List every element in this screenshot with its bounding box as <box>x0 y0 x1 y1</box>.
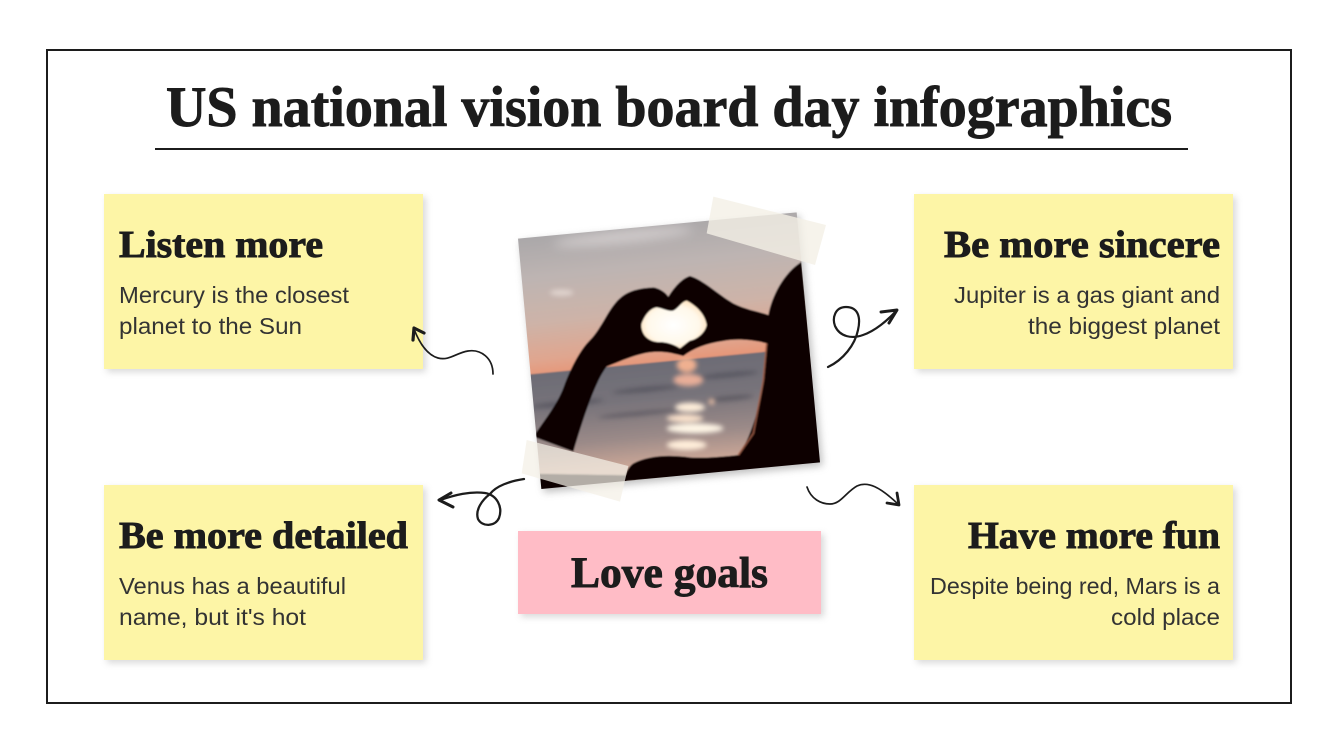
heading: listen more: Listen more <box>119 224 323 266</box>
panel: have more fun <box>914 485 1236 663</box>
text: have more fun <box>930 573 1221 630</box>
text: listen more: planet to the Sun <box>119 313 302 339</box>
tape: top right <box>707 197 826 265</box>
text: be more sincere <box>954 282 1220 339</box>
text: be more detailed: name, but it's hot <box>119 604 306 630</box>
heart opening glow <box>640 299 708 350</box>
heading: be more sincere: Be more sincere <box>944 224 1220 266</box>
waves <box>534 370 755 420</box>
arrow: to have more fun <box>807 484 899 505</box>
arrow: to be more sincere <box>828 307 897 367</box>
silhouette <box>533 262 823 482</box>
tape: bottom left <box>522 440 628 502</box>
text: listen more: Mercury is the closest <box>119 282 349 308</box>
panel: be more sincere <box>914 194 1236 372</box>
heading: love goals: Love goals <box>571 550 768 597</box>
arrow: to be more detailed <box>439 479 524 525</box>
text: listen more <box>119 282 349 339</box>
sun reflection <box>667 358 723 450</box>
photo: hands making a heart at sunset <box>517 196 826 502</box>
text: be more detailed <box>119 573 346 630</box>
heading: have more fun: Have more fun <box>968 515 1220 557</box>
arrow: to listen more <box>413 328 493 374</box>
text: be more sincere: Jupiter is a gas giant and <box>954 282 1220 308</box>
text: be more detailed: Venus has a beautiful <box>119 573 346 599</box>
heading: be more detailed: Be more detailed <box>119 515 408 557</box>
title: US national vision board day infographics <box>166 76 1172 139</box>
text: be more sincere: the biggest planet <box>1028 313 1220 339</box>
panel: be more detailed <box>104 485 426 663</box>
panel: love goals <box>518 531 824 617</box>
panel: listen more <box>104 194 426 372</box>
text: have more fun: Despite being red, Mars is a <box>930 573 1221 599</box>
text: have more fun: cold place <box>1111 604 1220 630</box>
